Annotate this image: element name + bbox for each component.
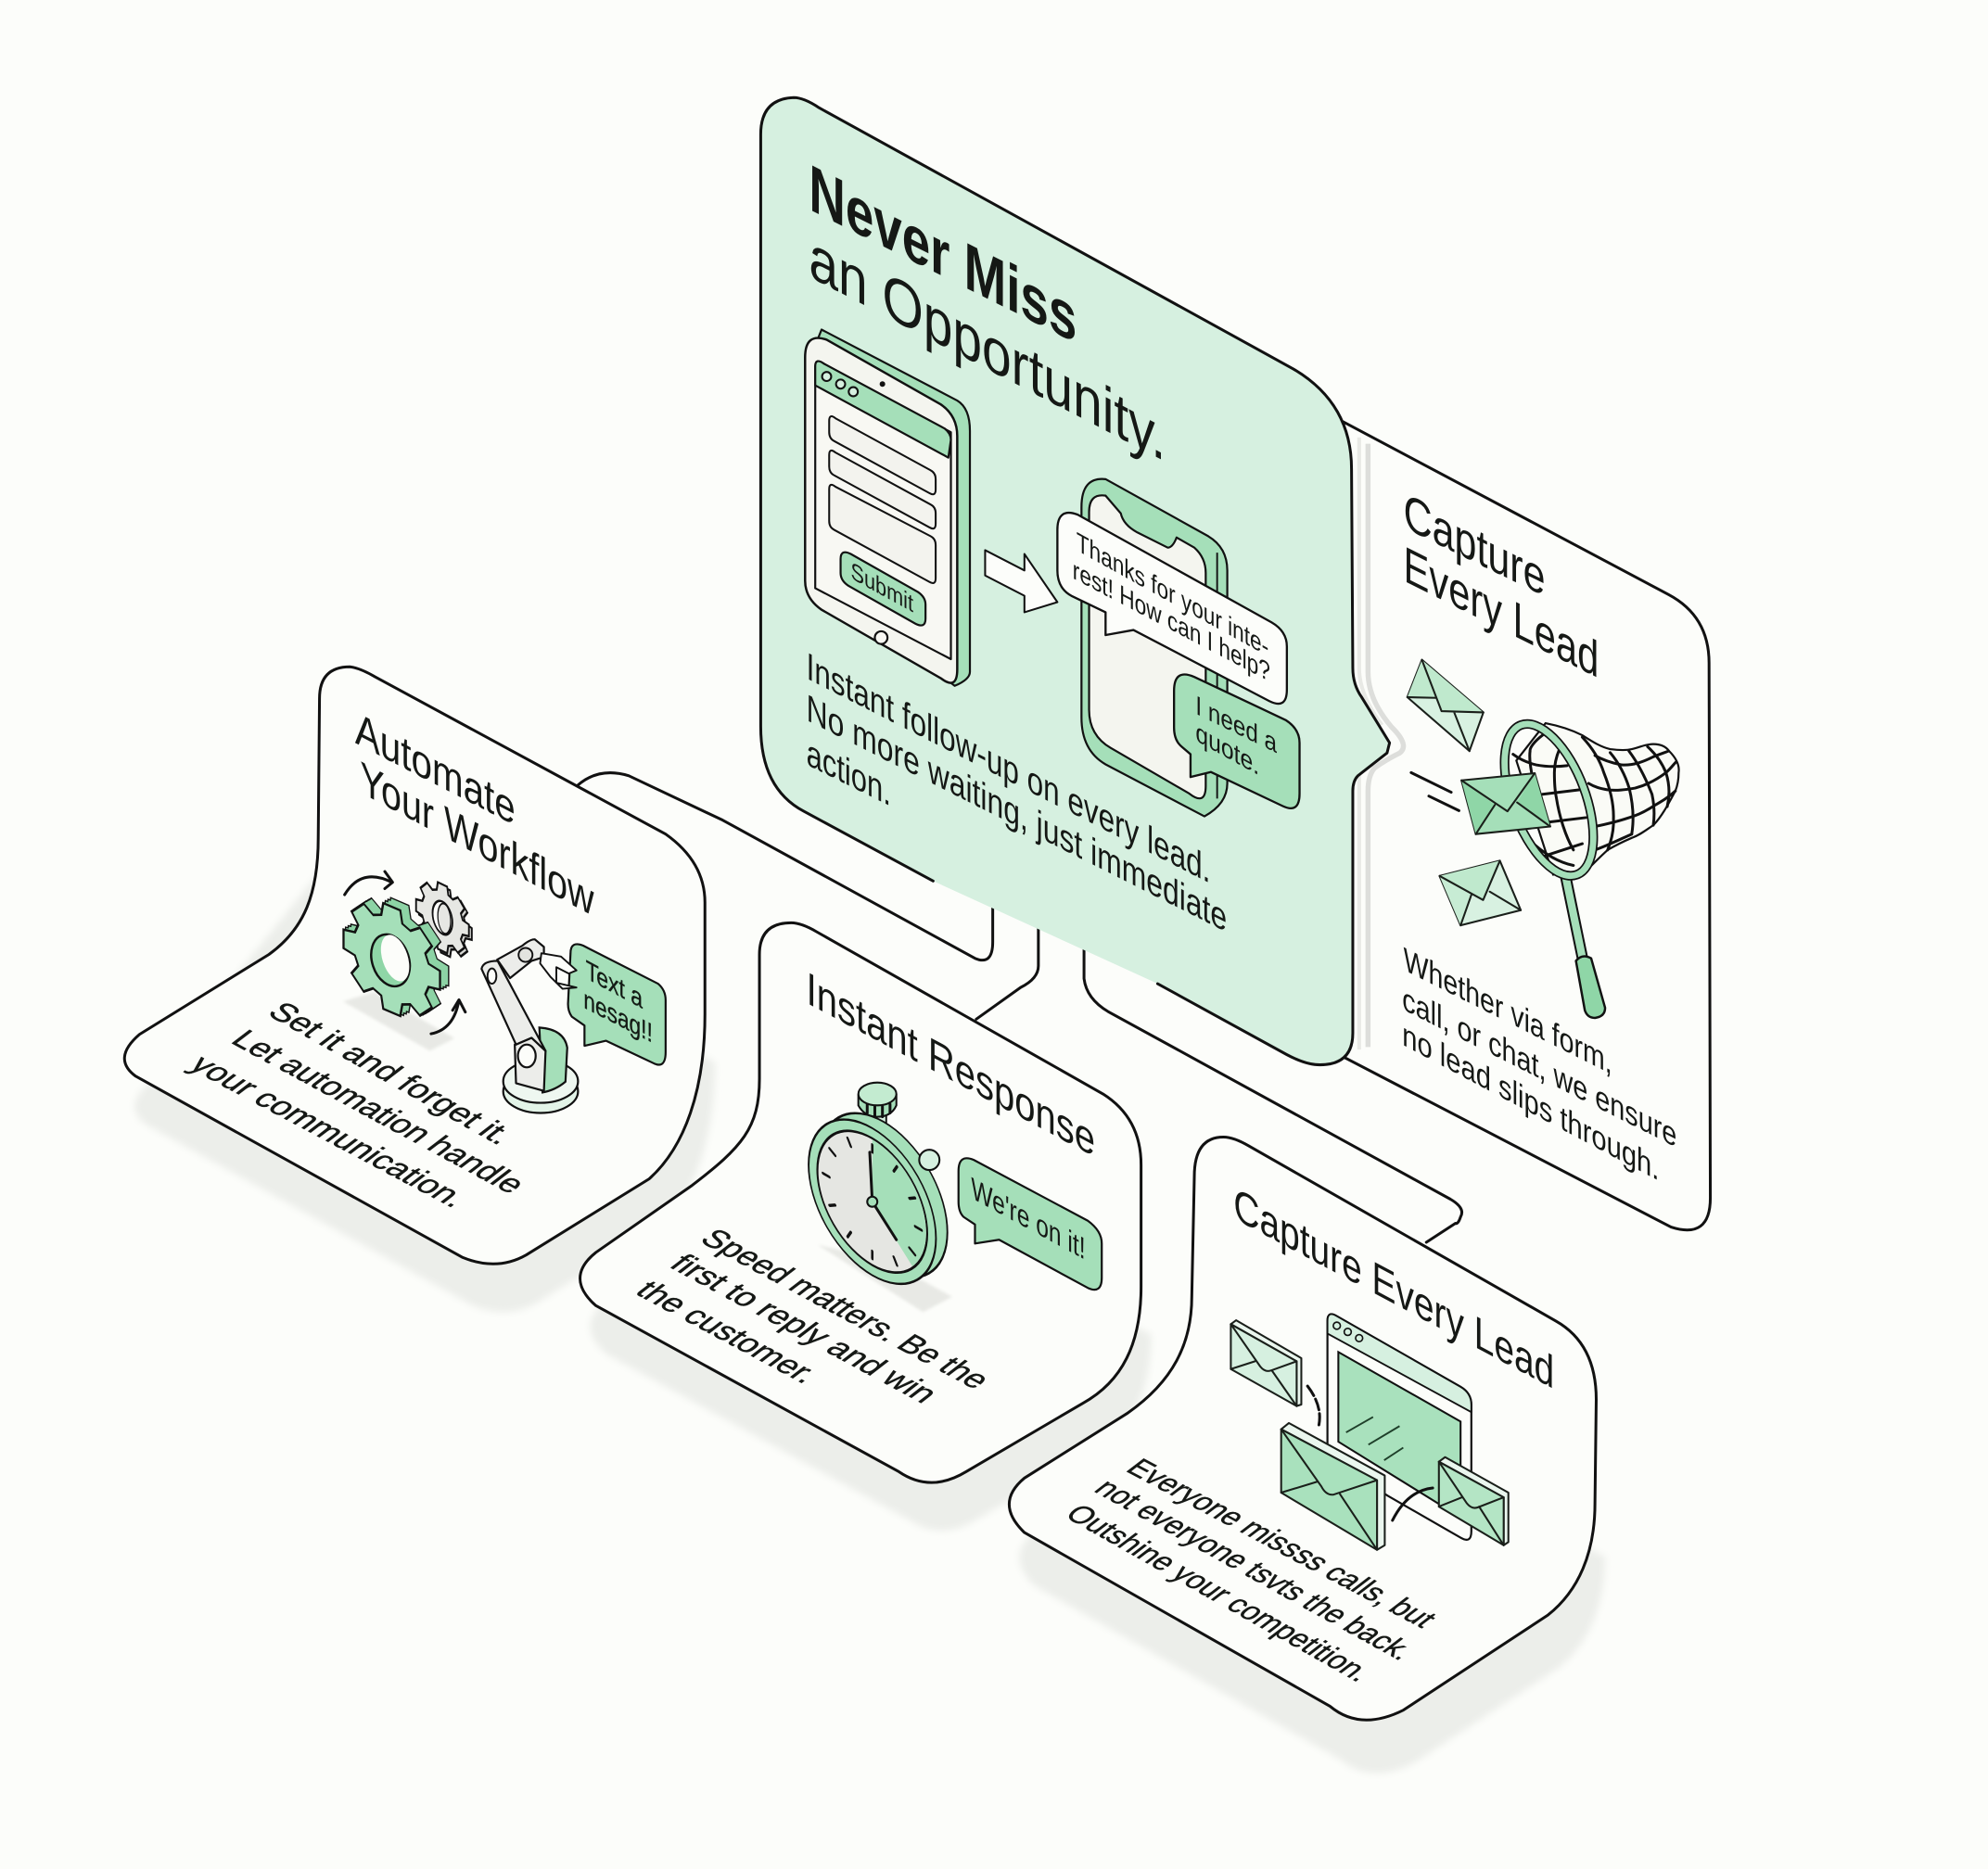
icon: robot arm xyxy=(481,939,578,1113)
side button xyxy=(919,1150,939,1170)
icon: net handle xyxy=(1566,877,1605,1018)
bubble: i need a quote: I need a xyxy=(1195,689,1277,759)
icon: tablet form: Submit xyxy=(850,557,913,618)
icon: browser window xyxy=(1328,1314,1472,1540)
body text: Outshine your competition. xyxy=(1058,1499,1380,1687)
icon: envelope top xyxy=(1408,660,1484,751)
panel: automate your workflow xyxy=(124,667,705,1264)
crown xyxy=(859,1083,897,1125)
body text: action. xyxy=(807,730,891,815)
icon: speed lines xyxy=(1411,772,1459,810)
connector: automate card back xyxy=(573,773,993,960)
icon: stopwatch xyxy=(809,1083,952,1312)
icon: small envelope xyxy=(1230,1320,1301,1406)
panel: never miss an opportunity (main) xyxy=(760,97,1390,1065)
panel: instant response xyxy=(580,922,1141,1482)
panel outline xyxy=(760,97,1390,1065)
icon: gear shadow xyxy=(343,992,454,1051)
icon: phone xyxy=(1081,479,1228,817)
icon: rotation arrow bottom xyxy=(431,999,465,1034)
heading: Instant Response xyxy=(807,962,1095,1167)
icon: large gear xyxy=(343,878,448,1036)
icon: right envelope xyxy=(1439,1457,1509,1545)
heading: Never Miss xyxy=(809,150,1077,358)
bubble: text a message: Text a xyxy=(586,954,644,1015)
heading xyxy=(1404,482,1599,690)
bubble: i need a quote: quote. xyxy=(1195,717,1259,782)
heading: Automate xyxy=(355,703,516,836)
panel edge shading xyxy=(1359,438,1404,1049)
body text: Everyone missss calls, but xyxy=(1118,1454,1444,1634)
bubble: text a message: nesag!! xyxy=(583,983,653,1049)
icon: curve to right envelope xyxy=(1393,1488,1433,1520)
bubble: text a message xyxy=(568,944,666,1064)
stopwatch hands xyxy=(870,1152,897,1240)
body text: first to reply and win xyxy=(662,1249,946,1408)
icon: butterfly net xyxy=(1513,723,1679,874)
shadows under cards xyxy=(134,859,1605,1774)
panel: capture every lead (right) xyxy=(1342,421,1711,1230)
panel: capture every lead (front) xyxy=(1009,1138,1596,1720)
body text: Set it and forget it. xyxy=(261,997,522,1151)
arrow xyxy=(985,550,1057,612)
heading: Every Lead xyxy=(1404,536,1599,690)
body text: Whether via form, xyxy=(1404,941,1612,1082)
connector: instant response card back xyxy=(976,915,1039,1019)
bubble: thanks for your interest: rest! How can I help? xyxy=(1073,554,1270,689)
icon: rotation arrow top xyxy=(345,871,392,895)
icon: tablet form xyxy=(805,330,970,686)
connector: capture card back xyxy=(1084,935,1462,1242)
icon: dashed motion curves xyxy=(1307,1386,1319,1428)
bubble: we're on it: We're on it! xyxy=(971,1171,1086,1266)
body text: Instant follow-up on every lead. xyxy=(807,643,1210,892)
heading: Capture xyxy=(1404,482,1545,608)
heading: Your Workflow xyxy=(360,752,594,927)
icon: large gear hole xyxy=(364,929,416,991)
body text: Speed matters. Be the xyxy=(693,1224,998,1394)
icon: net hoop xyxy=(1486,712,1612,887)
body text: Let automation handle xyxy=(223,1024,533,1199)
icon: envelope caught xyxy=(1461,773,1550,834)
body text: call, or chat, we ensure xyxy=(1402,980,1676,1155)
heading: Capture Every Lead xyxy=(1233,1178,1554,1400)
bubble: thanks for your interest: Thanks for your inte- xyxy=(1077,527,1268,663)
body text: your communication. xyxy=(182,1049,477,1213)
bubble: i need a quote xyxy=(1174,674,1300,808)
body text: no lead slips through. xyxy=(1402,1015,1659,1189)
heading xyxy=(355,703,594,927)
heading: an Opportunity. xyxy=(809,220,1166,476)
icon: envelope bottom xyxy=(1439,860,1521,925)
icon: small gear xyxy=(416,871,472,967)
panel green surface xyxy=(760,97,1390,1065)
icon: large envelope xyxy=(1281,1423,1384,1550)
body text: No more waiting, just immediate xyxy=(807,685,1227,941)
body text: not everyone tsvts the back. xyxy=(1087,1474,1422,1666)
body text: the customer. xyxy=(628,1276,827,1389)
